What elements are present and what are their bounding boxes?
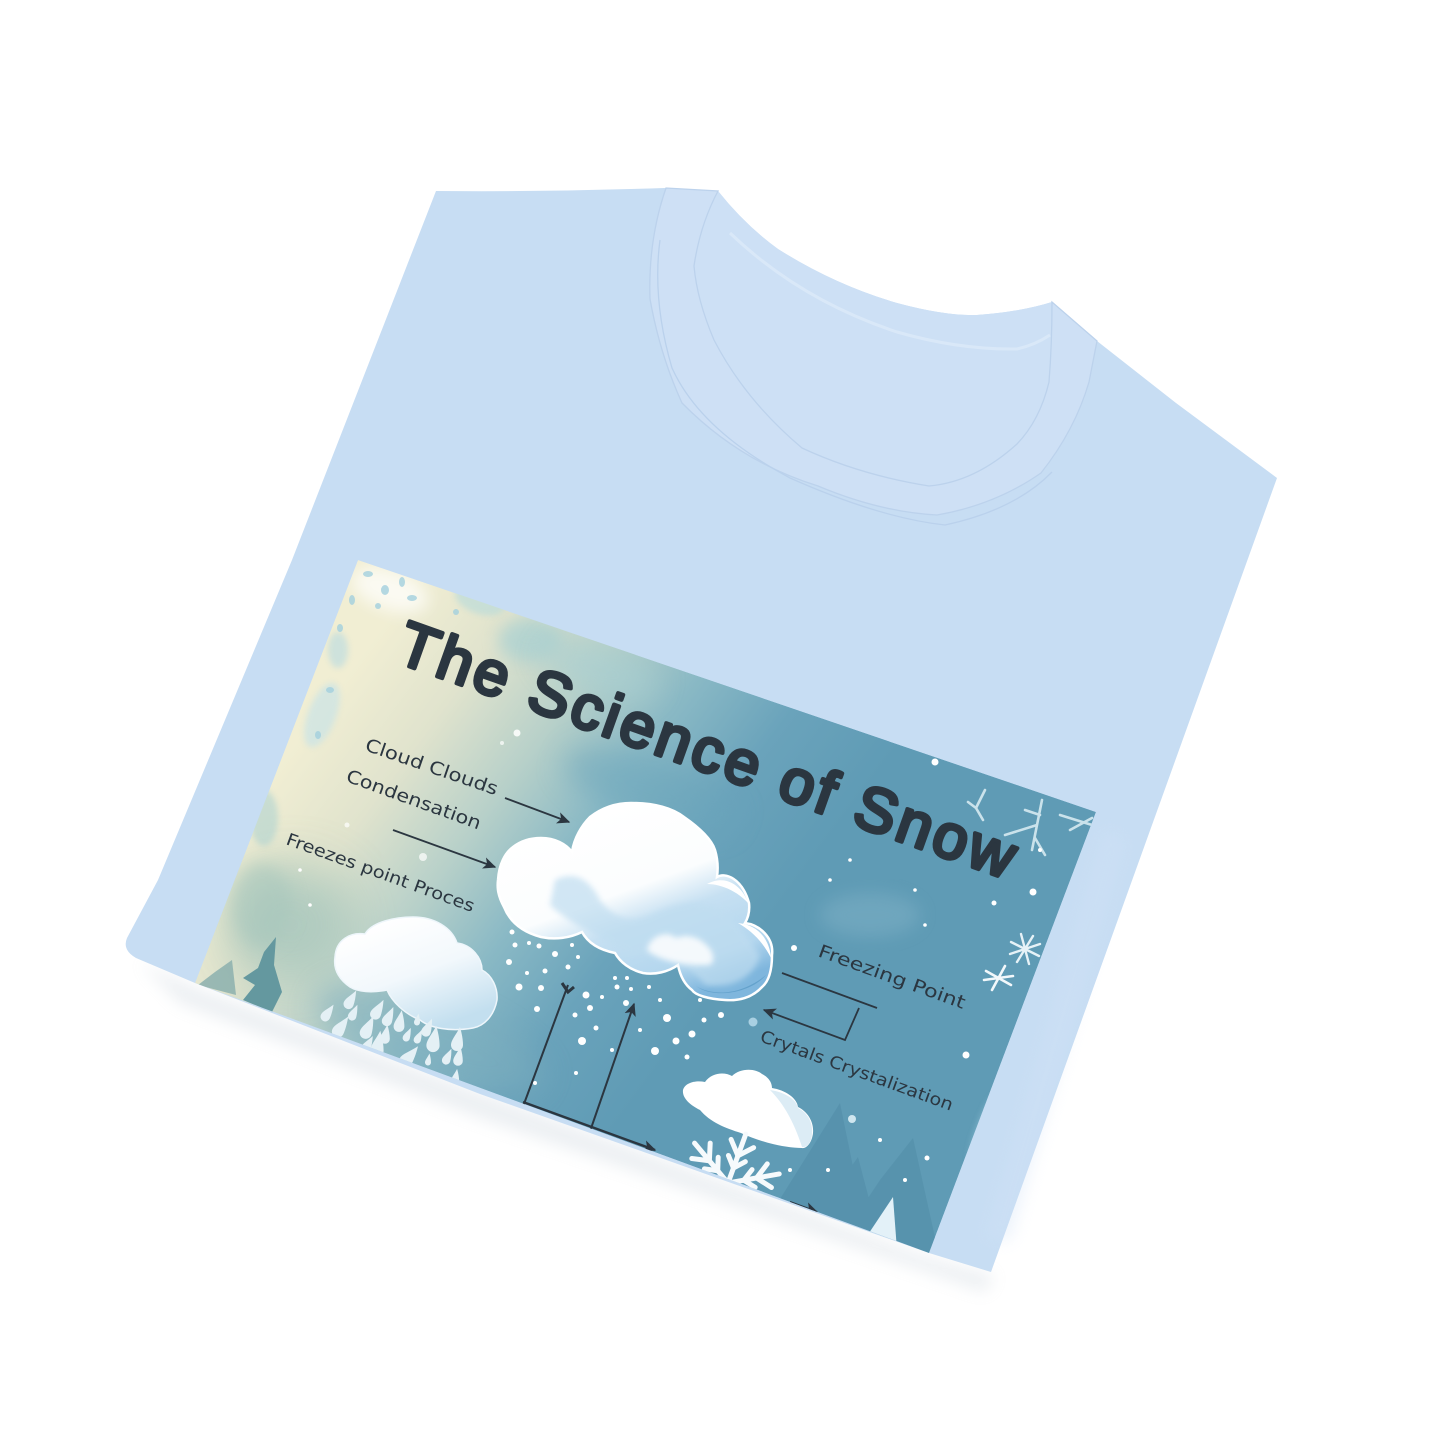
cloud bottom shade [696, 975, 766, 993]
main cloud [498, 803, 772, 1000]
arrow: horizontal [523, 1102, 655, 1150]
arrows up from ground [521, 983, 655, 1150]
label: freezing point: Freezing Point [815, 941, 968, 1014]
cloud shade [770, 1090, 812, 1147]
collar rib [650, 188, 1097, 515]
shirt silhouette [126, 188, 1277, 1272]
rain drops [319, 988, 463, 1086]
small right cloud [683, 1070, 813, 1148]
collar stitching [658, 240, 1052, 525]
frost branches top right [968, 790, 1092, 855]
label: crystals: Crytals Crystalization [757, 1027, 956, 1115]
arrow: freezing bracket [764, 973, 877, 1040]
inner neck band [730, 233, 1050, 349]
label: freezes point: Freezes point Proces [283, 830, 477, 917]
print background [195, 560, 1096, 1253]
arrow head: fletched [562, 983, 574, 992]
arrow: up left [521, 985, 568, 1112]
cloud rim crescents [707, 880, 771, 958]
mountains right [780, 1104, 935, 1253]
label: condensation: Condensation [343, 766, 484, 834]
ice peak [870, 1197, 896, 1241]
snowflake [689, 1132, 782, 1190]
arrow: clouds to cloud [505, 798, 569, 822]
title: The Science of Snow [389, 609, 1025, 892]
t-shirt body [126, 188, 1277, 1292]
watercolor wash [225, 618, 920, 1119]
right strip highlight [985, 830, 1125, 1240]
small left cloud [319, 917, 497, 1086]
snow dots [298, 730, 1042, 1182]
frost border [250, 558, 1125, 1171]
small arrow bottom right [790, 1202, 817, 1212]
neck opening [694, 191, 1052, 486]
print panel [195, 558, 1125, 1260]
arrow: condensation to cloud [393, 830, 495, 867]
label: cloud clouds: Cloud Clouds [362, 735, 501, 800]
arrow: up right [587, 1004, 634, 1140]
cloud highlight puff [647, 934, 713, 965]
cloud inner shade [550, 876, 760, 986]
shirt shadow [140, 962, 994, 1292]
trees left [198, 937, 282, 1012]
right edge snowflake small [984, 966, 1013, 990]
right edge snowflake large [1010, 934, 1040, 964]
